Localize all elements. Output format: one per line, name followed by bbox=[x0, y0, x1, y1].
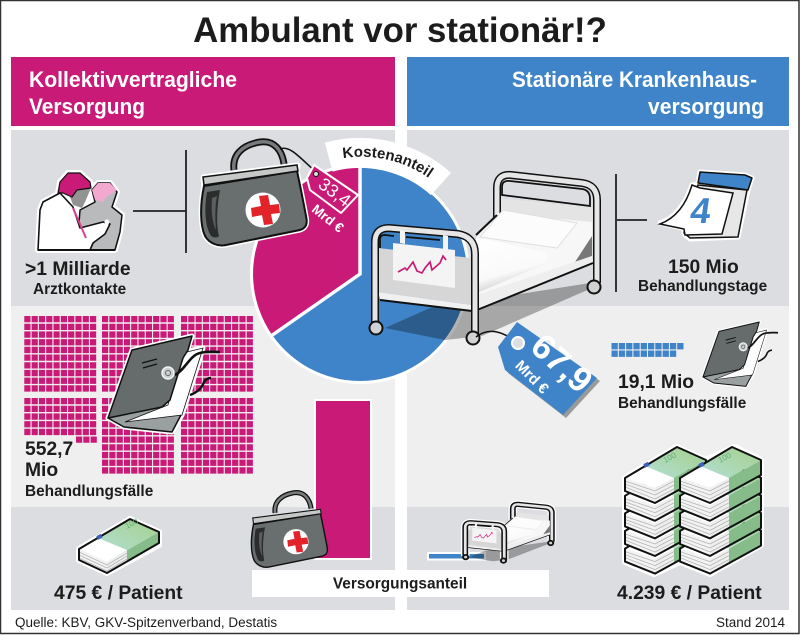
text: right treatment cases bbox=[618, 372, 747, 412]
icon: price tag 67,9: Mrd € bbox=[512, 357, 552, 398]
panel: left header: Kollektivvertragliche bbox=[29, 67, 237, 92]
panel: right header: Stationäre Krankenhaus- bbox=[512, 67, 757, 92]
icon: big hospital bed bbox=[370, 175, 600, 344]
date stamp: Stand 2014 bbox=[716, 615, 785, 630]
text: 4239 per patient: 4.239 € / Patient bbox=[617, 583, 762, 604]
text: Arztkontakte: >1 Milliarde bbox=[25, 259, 131, 280]
connector: doctor contacts to bag bbox=[133, 150, 186, 253]
panel: right header: versorgung bbox=[648, 94, 764, 119]
icon: calendar: 4 bbox=[688, 190, 714, 231]
text: Behandlungstage bbox=[638, 257, 768, 295]
icon: calendar bbox=[660, 172, 752, 239]
text: right treatment cases: 19,1 Mio bbox=[618, 372, 694, 393]
icon: price tag 67,9 bbox=[476, 322, 600, 418]
label: Versorgungsanteil: Versorgungsanteil bbox=[333, 576, 467, 592]
icon: small doctor bag bbox=[251, 493, 327, 567]
icon: small bed bbox=[463, 504, 553, 563]
title: Ambulant vor stationär!? bbox=[193, 11, 607, 50]
bar: magenta care share bbox=[315, 400, 371, 559]
panel: right header bbox=[407, 57, 789, 126]
icon: money stacks: 100 bbox=[662, 450, 678, 465]
label band: Kostenanteil: Kostenanteil bbox=[342, 146, 434, 178]
text: Behandlungstage: 150 Mio bbox=[668, 257, 739, 278]
icon: money stacks bbox=[625, 447, 761, 574]
icon: money stacks: 100 bbox=[717, 450, 733, 465]
icon: price tag 33,4: 33,4 bbox=[315, 174, 355, 211]
label band: Kostenanteil bbox=[325, 138, 451, 196]
icon: big doctor bag bbox=[201, 142, 307, 246]
icon: price tag 33,4: Mrd € bbox=[309, 201, 347, 236]
text: right treatment cases: Behandlungsfälle bbox=[618, 395, 747, 412]
panel: right column bands bbox=[407, 130, 789, 610]
chart: cost share pie bbox=[250, 164, 470, 384]
panel: left column bands bbox=[11, 130, 395, 610]
text: Behandlungstage: Behandlungstage bbox=[638, 278, 768, 295]
panel: left header: Versorgung bbox=[29, 94, 145, 119]
label: Versorgungsanteil bbox=[252, 570, 549, 597]
chart: 19.1 million treatment cases grid bbox=[612, 346, 684, 354]
source: Quelle: KBV, GKV-Spitzenverband, Destatis bbox=[15, 615, 277, 630]
icon: folder right bbox=[703, 322, 778, 386]
icon: single money bundle bbox=[79, 516, 159, 573]
chart: 552.7 million treatment cases grid bbox=[24, 319, 253, 470]
text: Arztkontakte: Arztkontakte bbox=[33, 281, 127, 298]
icon: folder left bbox=[108, 336, 220, 432]
bar: blue care share bbox=[428, 553, 485, 560]
text: left treatment cases: Behandlungsfälle bbox=[25, 483, 154, 500]
panel: left header bbox=[11, 57, 395, 126]
text: left treatment cases bbox=[25, 439, 154, 500]
connector: bed to calendar bbox=[616, 174, 647, 292]
icon: price tag 33,4 bbox=[280, 148, 358, 236]
text: 475 per patient: 475 € / Patient bbox=[54, 583, 183, 604]
icon: single money bundle: 100 bbox=[124, 516, 140, 531]
text: left treatment cases: Mio bbox=[25, 460, 58, 481]
icon: price tag 67,9: 67,9 bbox=[523, 326, 600, 401]
icon: doctor with patient bbox=[38, 173, 122, 250]
text: Arztkontakte bbox=[25, 259, 131, 298]
text: left treatment cases: 552,7 bbox=[25, 439, 73, 460]
